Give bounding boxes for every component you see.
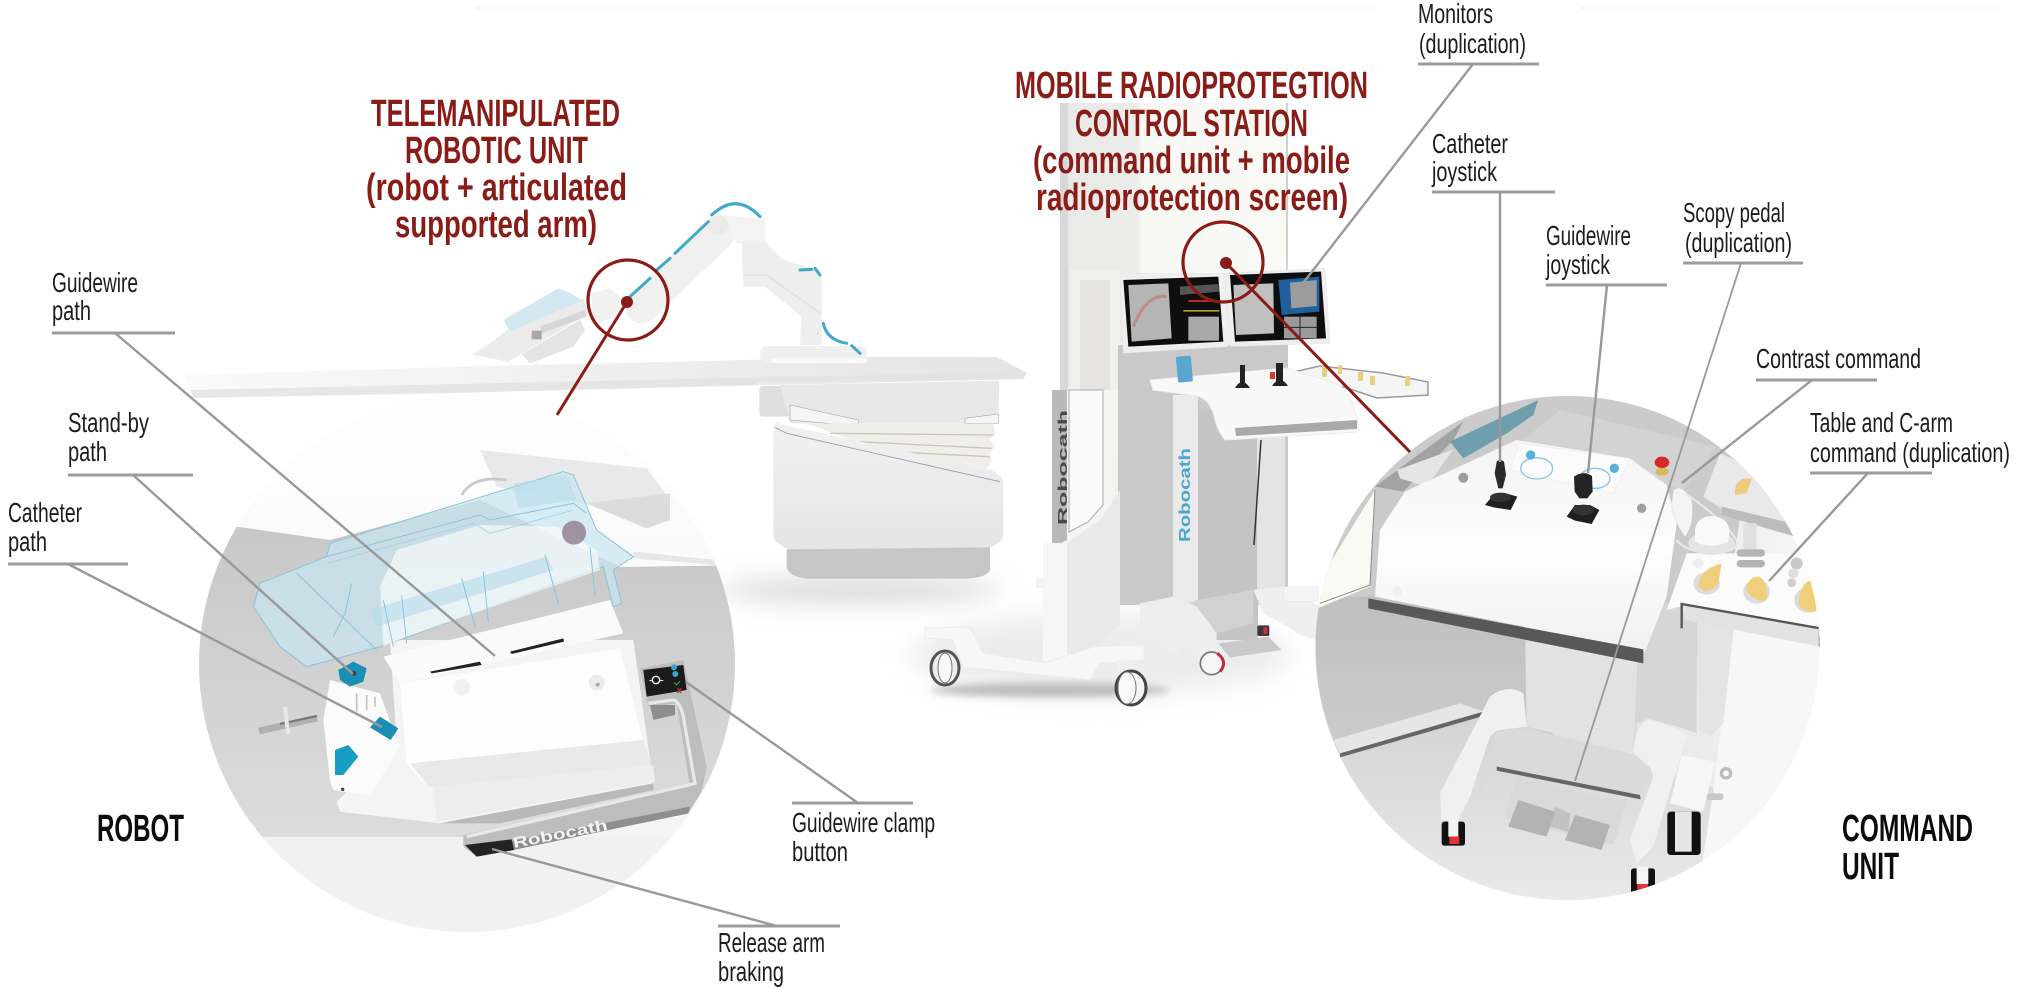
label: monitors <box>1300 0 1539 287</box>
articulated arm <box>592 204 867 363</box>
mobile screen base and casters <box>925 627 1170 705</box>
label: release arm braking: braking <box>718 956 784 987</box>
vertical brand on screen: Robocath <box>1055 410 1070 525</box>
rear arm bracket <box>462 450 740 567</box>
label: release arm braking <box>492 849 840 987</box>
screen lower pane and glass <box>1036 390 1120 663</box>
wall and floor <box>1316 597 1714 900</box>
heading: telemanipulated robotic unit: TELEMANIPULATED <box>371 93 620 135</box>
emergency stop <box>1655 457 1669 476</box>
heading: command unit: UNIT <box>1842 846 1899 888</box>
label: release arm braking: Release arm <box>718 927 825 958</box>
robot body <box>323 640 707 857</box>
pedestal and column <box>1525 603 1737 753</box>
luer connector <box>259 707 317 734</box>
rail brand text: Robocath <box>512 817 609 852</box>
label: stand-by path: path <box>68 436 107 467</box>
back console <box>1375 422 1463 492</box>
label: stand-by path <box>68 407 353 674</box>
upper tray <box>1704 454 1793 550</box>
translucent blue cover <box>253 472 633 667</box>
label: catheter path: path <box>8 526 47 557</box>
label: catheter joystick: joystick <box>1431 156 1498 187</box>
control unit foot <box>1140 587 1320 675</box>
contrast command <box>1672 488 1737 553</box>
heading: telemanipulated robotic unit <box>366 93 627 246</box>
label: stand-by path: Stand-by <box>68 407 149 438</box>
brake button <box>465 839 514 857</box>
heading: mobile radioprotection control station: CONTROL STATION <box>1075 103 1308 145</box>
label: guidewire path <box>52 267 495 656</box>
heading: mobile radioprotection control station: radioprotection screen) <box>1036 177 1348 219</box>
label: guidewire clamp button: button <box>792 836 848 867</box>
command background <box>1314 396 1822 902</box>
foot pedals <box>1508 800 1617 850</box>
mobile screen edge <box>1318 491 1374 608</box>
guidewire joystick <box>1567 473 1599 524</box>
radioprotection screen upper panel <box>1060 103 1288 510</box>
label: guidewire joystick: joystick <box>1545 249 1611 280</box>
label: catheter joystick: Catheter <box>1432 128 1508 159</box>
label: guidewire path: Guidewire <box>52 267 138 298</box>
label: scopy pedal: (duplication) <box>1685 227 1792 258</box>
lower command tray <box>1667 516 1822 647</box>
U-shaped foot <box>1440 689 1687 863</box>
label: catheter joystick <box>1431 128 1555 462</box>
heading: mobile radioprotection control station <box>1015 65 1368 219</box>
desk surface <box>1368 440 1677 663</box>
panel: robot close-up circle <box>199 450 735 932</box>
heading: robot: ROBOT <box>97 808 184 850</box>
command desk <box>1150 355 1428 440</box>
heading: telemanipulated robotic unit: (robot + articulated <box>366 167 627 209</box>
instruction placard <box>1510 443 1630 493</box>
label: table and c-arm command <box>1769 407 2010 581</box>
column brand: Robocath <box>1177 448 1194 542</box>
label: guidewire path: path <box>52 295 91 326</box>
catheter joystick <box>1485 460 1517 510</box>
label: guidewire clamp button <box>686 682 935 867</box>
floor shadow <box>910 615 1290 695</box>
table base <box>759 381 1003 579</box>
illustration: mobile radioprotection control station <box>910 103 1428 705</box>
heading: mobile radioprotection control station: (command unit + mobile <box>1033 140 1350 182</box>
label: catheter path <box>8 497 382 727</box>
casters <box>1442 755 1731 898</box>
panel: command unit close-up circle <box>1313 390 1840 923</box>
page top rule <box>476 7 2000 9</box>
label: catheter path: Catheter <box>8 497 82 528</box>
heading: telemanipulated robotic unit: ROBOTIC UNIT <box>405 130 588 172</box>
small robot <box>472 288 588 363</box>
table top <box>184 357 1027 398</box>
label: guidewire joystick: Guidewire <box>1546 220 1631 251</box>
label: table and c-arm command: Table and C-arm <box>1810 407 1953 438</box>
clamp handle rail <box>463 660 707 857</box>
heading: command unit <box>1842 808 1973 888</box>
robot background <box>199 500 735 932</box>
label: scopy pedal: Scopy pedal <box>1683 197 1785 228</box>
label: scopy pedal <box>1575 197 1803 781</box>
label: monitors: (duplication) <box>1419 28 1526 59</box>
rear slit and white panel <box>384 600 624 674</box>
illustration: robot on articulated arm <box>472 204 867 363</box>
gray column backing <box>1118 345 1288 640</box>
label: guidewire clamp button: Guidewire clamp <box>792 807 935 838</box>
callout: control station locator <box>1183 222 1410 452</box>
label: contrast command <box>1682 343 1921 483</box>
illustration: operating table <box>184 357 1027 604</box>
joysticks on desk <box>1235 363 1288 388</box>
monitors <box>1120 268 1330 353</box>
label: guidewire joystick <box>1545 220 1667 473</box>
catheter module <box>323 662 400 795</box>
right bright background <box>1703 630 1776 860</box>
heading: mobile radioprotection control station: MOBILE RADIOPROTEGTION <box>1015 65 1368 107</box>
callout: telemanipulated robotic unit locator <box>557 260 668 415</box>
label: contrast command: Contrast command <box>1756 343 1921 374</box>
clamp button panel <box>643 664 687 697</box>
heading: telemanipulated robotic unit: supported arm) <box>395 204 597 246</box>
